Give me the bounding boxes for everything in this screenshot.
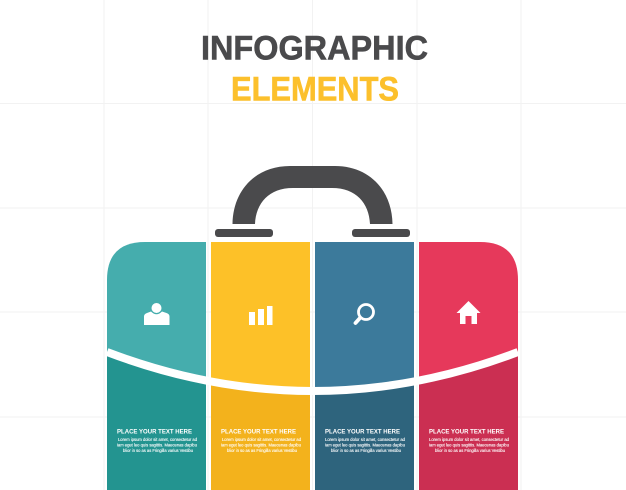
panel: teal column: [107, 242, 206, 490]
title: [201, 30, 428, 108]
text block: blue: [325, 428, 405, 453]
text block: teal: blior in so as as Fringilla varius Vestibu: [123, 448, 193, 453]
icon: bar chart: [249, 306, 272, 325]
text block: blue: Lorem ipsum dolor sit amet, consectetur ad: [325, 437, 405, 442]
panel: blue column: [315, 242, 414, 490]
text block: red: Lorem ipsum dolor sit amet, consectetur ad: [429, 437, 509, 442]
text block: teal: Lorem ipsum dolor sit amet, consectetur ad: [118, 437, 197, 442]
icon: person: [144, 303, 170, 325]
text block: yellow: Lorem ipsum dolor sit amet, consectetur ad: [222, 437, 301, 442]
text block: red: [429, 428, 509, 453]
text block: teal: [117, 428, 197, 453]
curved white band: [107, 352, 518, 391]
text block: red: PLACE YOUR TEXT HERE: [429, 428, 505, 436]
text block: yellow: PLACE YOUR TEXT HERE: [221, 428, 297, 436]
text block: yellow: blior in so as as Fringilla varius Vestibu: [227, 448, 297, 453]
handle arch: [232, 166, 392, 224]
panel: red column: [419, 242, 518, 490]
text block: blue: iam eget leo quis sagittis. Maecenas dapibu: [325, 442, 405, 448]
title line: INFOGRAPHIC: INFOGRAPHIC: [201, 30, 428, 68]
title line: ELEMENTS: ELEMENTS: [231, 70, 399, 108]
text block: blue: blior in so as as Fringilla varius Vestibu: [331, 448, 401, 453]
left foot: [215, 229, 273, 237]
text block: yellow: [221, 428, 301, 453]
text block: red: iam eget leo quis sagittis. Maecenas dapibu: [429, 442, 509, 448]
text block: yellow: iam eget leo quis sagittis. Maecenas dapibu: [221, 442, 301, 448]
icon: magnifier: [356, 304, 374, 323]
text block: teal: PLACE YOUR TEXT HERE: [117, 428, 193, 436]
panel: yellow column: [211, 242, 310, 490]
icon: house: [456, 301, 480, 324]
text block: blue: PLACE YOUR TEXT HERE: [325, 428, 401, 436]
text block: red: blior in so as as Fringilla varius Vestibu: [435, 448, 505, 453]
right foot: [352, 229, 410, 237]
briefcase handle: [215, 166, 410, 237]
text block: teal: iam eget leo quis sagittis. Maecenas dapibu: [117, 442, 197, 448]
